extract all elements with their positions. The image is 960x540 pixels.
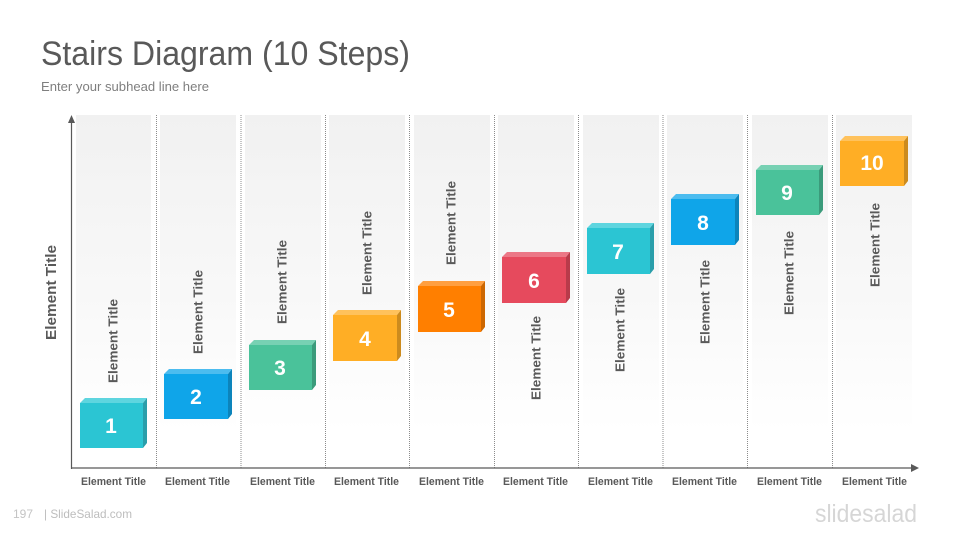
- step 4: 4: [359, 328, 371, 351]
- step 5: [418, 281, 485, 332]
- rotated step labels: Element Title: [868, 203, 882, 287]
- step 5: 5: [443, 299, 455, 322]
- subhead: Enter your subhead line here: [41, 79, 209, 94]
- x axis arrow: [71, 464, 919, 472]
- step 8: [671, 194, 739, 245]
- step 6: [502, 252, 570, 303]
- x axis labels: Element Title: [588, 476, 653, 488]
- step 7: [587, 223, 654, 274]
- step 3: 3: [274, 357, 286, 380]
- title: Stairs Diagram (10 Steps): [41, 35, 410, 73]
- column backgrounds: [76, 115, 912, 467]
- step 10: 10: [860, 152, 884, 175]
- rotated step labels: Element Title: [190, 270, 206, 354]
- rotated step labels: Element Title: [106, 299, 120, 383]
- x axis labels: Element Title: [81, 476, 146, 488]
- step 4: [333, 310, 401, 361]
- rotated step labels: Element Title: [360, 211, 374, 295]
- x axis labels: Element Title: [757, 476, 822, 488]
- step 9: [756, 165, 823, 215]
- x axis labels: Element Title: [419, 476, 484, 488]
- step 6: 6: [528, 270, 540, 293]
- x axis labels: Element Title: [842, 476, 907, 488]
- rotated step labels: Element Title: [444, 181, 458, 265]
- rotated step labels: Element Title: [698, 260, 712, 344]
- step 7: 7: [612, 241, 624, 264]
- y axis title: Element Title: [43, 245, 60, 340]
- rotated step labels: Element Title: [528, 316, 544, 400]
- x axis labels: Element Title: [503, 476, 568, 488]
- step 8: 8: [697, 212, 709, 235]
- page number: 197: [13, 507, 33, 521]
- x axis labels: Element Title: [165, 476, 230, 488]
- step 10: [840, 136, 908, 186]
- rotated step labels: [106, 181, 882, 400]
- x axis labels: Element Title: [334, 476, 399, 488]
- y axis arrow: [68, 115, 75, 469]
- step 3: [249, 340, 316, 390]
- rotated step labels: Element Title: [612, 288, 628, 372]
- rotated step labels: Element Title: [274, 240, 290, 324]
- x axis labels: Element Title: [250, 476, 315, 488]
- x axis labels: Element Title: [672, 476, 737, 488]
- step 9: 9: [781, 182, 793, 205]
- rotated step labels: Element Title: [782, 231, 796, 315]
- step 1: [80, 398, 147, 448]
- x axis labels: [81, 476, 907, 488]
- footer source: | SlideSalad.com: [44, 507, 132, 521]
- logo wordmark: slidesalad: [815, 500, 917, 528]
- step 2: [164, 369, 232, 419]
- step 2: 2: [190, 386, 202, 409]
- step 1: 1: [105, 415, 117, 438]
